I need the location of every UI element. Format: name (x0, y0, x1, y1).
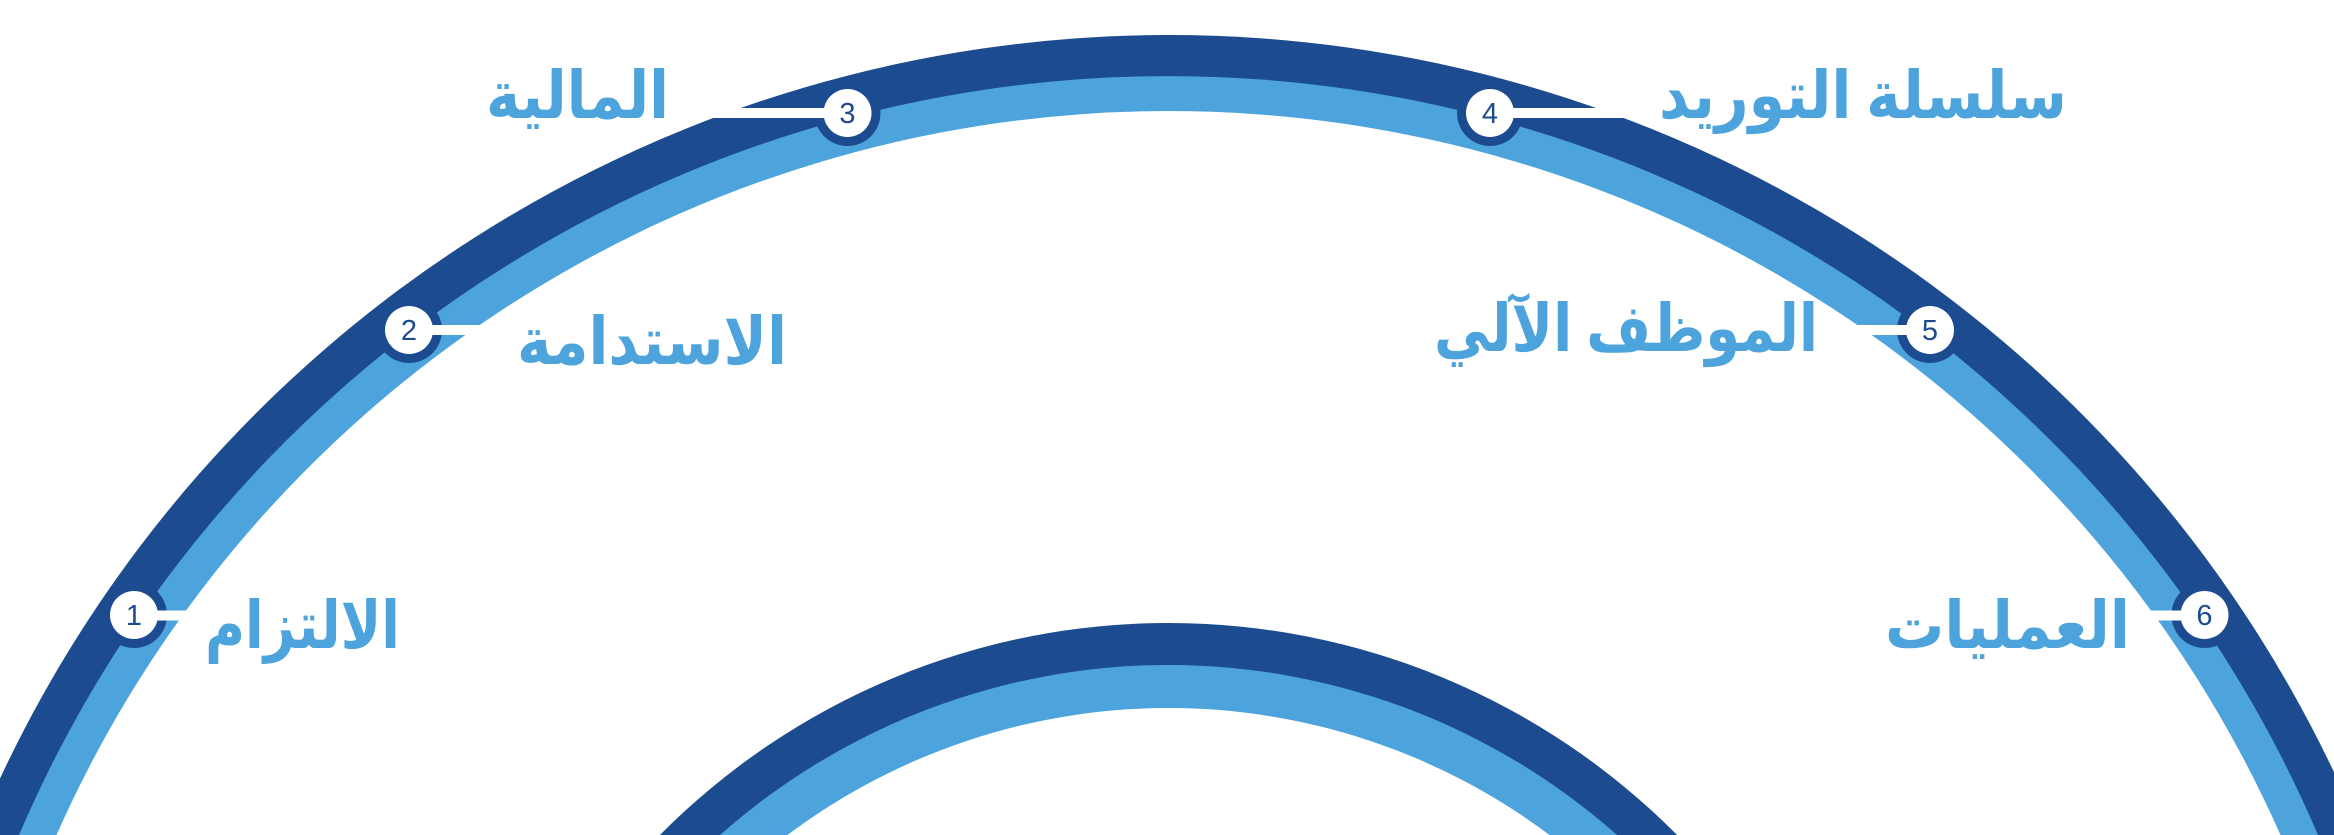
label: supply chain: سلسلة التوريد (1659, 60, 2067, 135)
label: sustainability: الاستدامة (517, 306, 787, 379)
marker 5: 5 (1922, 315, 1938, 347)
marker 5 (1840, 297, 1963, 363)
marker 3: 3 (839, 98, 856, 130)
marker 4: 4 (1482, 98, 1498, 130)
marker 1: 1 (126, 600, 142, 632)
marker 2 (376, 297, 499, 363)
label: operations: العمليات (1885, 590, 2130, 663)
marker 2: 2 (401, 315, 417, 347)
marker 1 (101, 582, 204, 648)
marker 6: 6 (2196, 600, 2213, 632)
label: finance: المالية (486, 60, 669, 133)
label: commitment: الالتزام (205, 590, 400, 665)
inner arc band (660, 623, 1677, 835)
label: robotic employee: الموظف الآلي (1434, 292, 1818, 368)
marker 3 (690, 80, 880, 146)
marker 4 (1457, 80, 1648, 146)
marker 6 (2134, 582, 2238, 648)
